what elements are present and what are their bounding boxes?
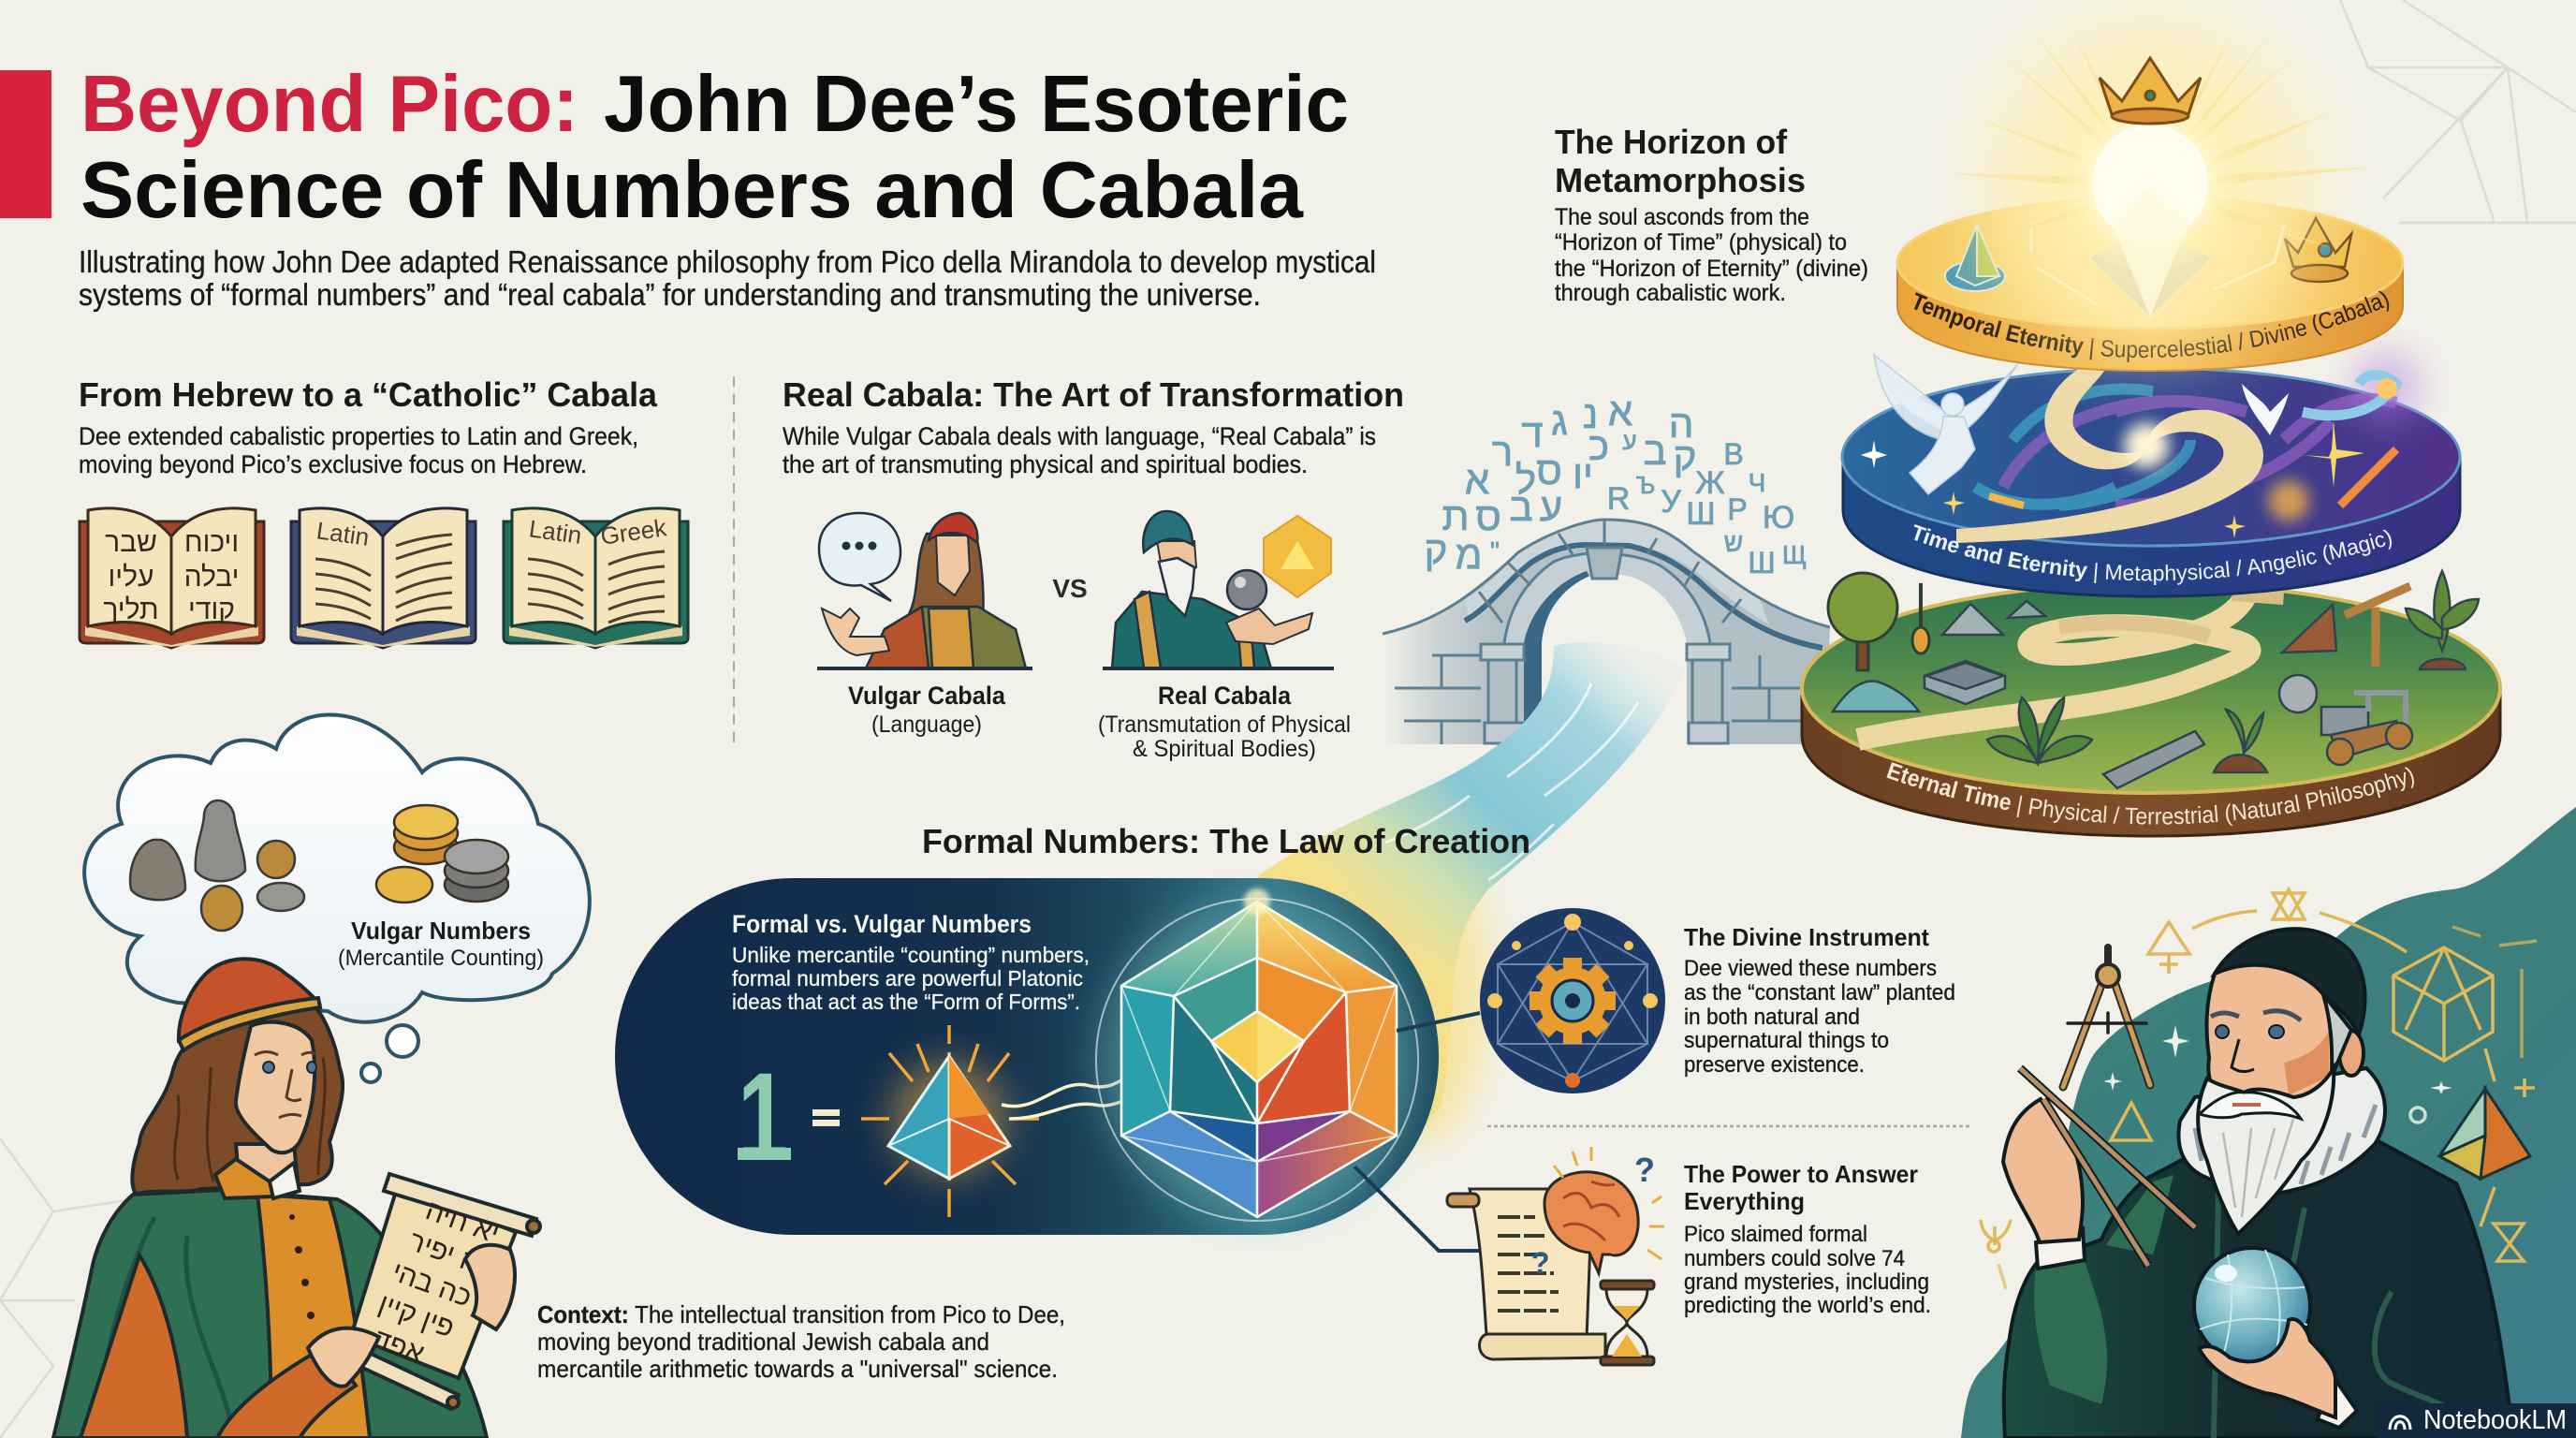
scroll text: אפד: [371, 1324, 428, 1370]
subtitle: Illustrating how John Dee adapted Renaissance philosophy from Pico della Mirandola to develop mystical: [79, 244, 1376, 279]
yellow glow behind pill: [1357, 824, 1488, 1142]
text: context: moving beyond traditional Jewish cabala and: [537, 1328, 989, 1356]
text: the divine instrument: preserve existence.: [1684, 1052, 1865, 1078]
text: the power to answer everything: Pico slaimed formal: [1684, 1222, 1867, 1247]
floating letters: ר: [1492, 430, 1513, 474]
scroll text: יא חיה: [421, 1195, 504, 1250]
upper hand: [2003, 1099, 2083, 1242]
section: from Hebrew to Catholic cabala: moving beyond Pico’s exclusive focus on Hebrew.: [79, 450, 587, 478]
text: the power to answer everything: grand mysteries, including: [1684, 1269, 1929, 1295]
floating letters: У: [1661, 484, 1681, 520]
text: the power to answer everything: [1684, 1160, 1931, 1318]
stream of light: [1236, 642, 1685, 1161]
floating letters: ש: [1724, 528, 1743, 557]
title: Beyond Pico:: [80, 60, 578, 149]
icon: Latin book: [291, 508, 476, 648]
hair: [132, 1003, 343, 1194]
icon: scroll, brain and hourglass: ?: [1634, 1151, 1655, 1189]
floating letters: [1425, 389, 1807, 580]
text: horizon of metamorphosis: [1555, 123, 1868, 306]
tier 2: metaphysical angelic disc: [1842, 353, 2460, 596]
floating letters: כ: [1588, 424, 1609, 468]
text: horizon of metamorphosis: through cabalistic work.: [1555, 280, 1786, 306]
section: real cabala: [783, 375, 1404, 478]
decorative geometric lines top right: [2340, 0, 2576, 223]
panel: formal numbers pill: [615, 878, 1439, 1235]
galaxy arms: [2003, 399, 2396, 506]
floating letters: א: [1608, 389, 1632, 433]
scroll text: יה יפיר: [405, 1225, 490, 1282]
section: from Hebrew to Catholic cabala: From Hebrew to a “Catholic” Cabala: [79, 375, 658, 414]
illustration: real cabala figure: [1112, 511, 1331, 668]
robe: [53, 1190, 487, 1438]
dove: [2242, 384, 2289, 435]
floating letters: Щ: [1782, 540, 1807, 569]
illustration: John Dee: [2003, 929, 2514, 1438]
thought bubbles: [387, 1025, 418, 1057]
icon: scroll, brain and hourglass: [1447, 1147, 1664, 1365]
floating letters: ק: [1425, 528, 1447, 572]
teal background shape: [1961, 807, 2576, 1438]
neck and collar: [236, 1144, 298, 1187]
text: formal vs vulgar: formal numbers are powerful Platonic: [732, 966, 1083, 990]
left prism: [1945, 225, 2005, 291]
section: from Hebrew to Catholic cabala: [79, 375, 658, 478]
label: real cabala: (Transmutation of Physical: [1098, 712, 1351, 738]
text: the divine instrument: in both natural and: [1684, 1005, 1860, 1030]
crystal orb: [2194, 1248, 2310, 1364]
floating letters: B: [1723, 437, 1744, 471]
subtitle: systems of “formal numbers” and “real cabala” for understanding and transmuting the universe.: [79, 277, 1261, 312]
sun with rays: [1945, 19, 2378, 346]
connector to divine instrument: [1397, 1013, 1480, 1031]
text: horizon of metamorphosis: The soul asconds from the: [1555, 204, 1809, 230]
small crown: [2285, 218, 2351, 282]
scroll: [351, 1185, 516, 1378]
text: context: [537, 1300, 1065, 1383]
label: vulgar cabala: (Language): [871, 712, 982, 738]
floating letters: ": [1490, 536, 1500, 565]
text: the power to answer everything: predicting the world’s end.: [1684, 1293, 1931, 1318]
connector to power to answer: [1354, 1167, 1480, 1251]
illustration: Pico della Mirandola: [53, 959, 540, 1438]
text: formal vs vulgar: Formal vs. Vulgar Numbers: [732, 910, 1032, 938]
floating letters: ב: [1643, 429, 1667, 473]
head: [2207, 961, 2333, 1114]
cuff lower: [2318, 1374, 2357, 1428]
icon: Latin and Greek book: Greek: [599, 513, 669, 550]
tier 3 label: Eternal Time | Physical / Terrestrial (Natural Philosophy): [1887, 762, 2414, 826]
floating letters: ד: [1521, 411, 1544, 455]
hat: [2215, 929, 2365, 1034]
machine: [2279, 675, 2317, 712]
symbols around John Dee: [1981, 889, 2537, 1289]
scroll text: כה בהי: [388, 1256, 476, 1313]
icon: Hebrew book: ויכוח: [184, 527, 239, 558]
sapling: [2226, 710, 2263, 753]
text: formal vs vulgar: Unlike mercantile “counting” numbers,: [732, 943, 1090, 967]
icon: Hebrew book: שבר: [105, 527, 157, 558]
rocks and tools: [1833, 571, 2479, 788]
angel: [1874, 355, 2018, 494]
text: the power to answer everything: The Power to Answer: [1684, 1160, 1918, 1188]
winding path: [1858, 594, 2250, 740]
lower arm: [217, 1345, 356, 1438]
title accent bar: [0, 70, 51, 218]
floating letters: Ъ: [1636, 471, 1655, 499]
scroll text: פין קיין: [374, 1288, 459, 1343]
dotted divider: [1487, 1125, 1971, 1127]
dividers: [2020, 1068, 2195, 1266]
floating letters: ע: [1540, 485, 1562, 529]
face: [236, 1022, 315, 1152]
floating letters: R: [1607, 481, 1630, 517]
floating letters: ת: [1442, 494, 1470, 538]
floating letters: Ю: [1763, 500, 1794, 536]
numeral one: 1: [738, 1048, 788, 1187]
subtitle: [79, 244, 1376, 312]
text: the divine instrument: supernatural things to: [1684, 1028, 1889, 1053]
label: vulgar cabala: Vulgar Cabala: [848, 682, 1006, 710]
floating letters: ג: [1551, 399, 1568, 443]
text: the divine instrument: Dee viewed these numbers: [1684, 956, 1937, 981]
floating letters: ס: [1475, 494, 1501, 538]
floating letters: ה: [1669, 402, 1693, 446]
floating letters: ס: [1536, 448, 1562, 492]
text: horizon of metamorphosis: The Horizon of: [1555, 123, 1788, 161]
floating letters: ע: [1622, 427, 1637, 455]
section: real cabala: Real Cabala: The Art of Transformation: [783, 375, 1404, 414]
text: horizon of metamorphosis: Metamorphosis: [1555, 161, 1806, 199]
floating letters: Ш: [1748, 546, 1776, 580]
vulgar baseline: [817, 667, 1032, 670]
text: context: Context: The intellectual transition from Pico to Dee,: [537, 1300, 1065, 1328]
heading: formal numbers: Formal Numbers: The Law of Creation: [922, 822, 1530, 860]
title: Science of Numbers and Cabala: [80, 146, 1304, 235]
section: real cabala: While Vulgar Cabala deals with language, “Real Cabala” is: [783, 422, 1376, 450]
golden path: [2044, 368, 2145, 469]
icon: prism on teal: [2439, 1089, 2530, 1179]
icon: Latin and Greek book: Latin: [527, 514, 583, 550]
thought cloud: [84, 714, 590, 1082]
text: formal vs vulgar: [732, 910, 1090, 1014]
icon: Hebrew book: קודי: [188, 594, 235, 625]
tree: [1828, 573, 1929, 670]
text: the power to answer everything: Everything: [1684, 1187, 1805, 1215]
icon: Latin book: Latin: [315, 516, 371, 551]
icon: compass: [2063, 947, 2150, 1087]
floating letters: Ж: [1695, 465, 1725, 501]
text: the power to answer everything: numbers could solve 74: [1684, 1246, 1905, 1271]
text: formal vs vulgar: ideas that act as the “Form of Forms”.: [732, 990, 1080, 1014]
floating letters: ב: [1509, 485, 1533, 529]
text: horizon of metamorphosis: “Horizon of Time” (physical) to: [1555, 229, 1847, 256]
tier 2 label: Time and Eternity | Metaphysical / Angelic (Magic): [1913, 524, 2392, 585]
decorative geometric lines lower left: [0, 1138, 133, 1438]
icon: Latin and Greek book: [504, 508, 688, 648]
floating letters: נ: [1583, 392, 1598, 436]
vertical divider: [733, 376, 735, 747]
icon: Hebrew book: תליך: [103, 594, 159, 625]
section: from Hebrew to Catholic cabala: Dee extended cabalistic properties to Latin and Greek,: [79, 422, 638, 450]
title: [80, 60, 1349, 235]
cuff upper: [2036, 1228, 2085, 1269]
label: vulgar numbers: (Mercantile Counting): [338, 946, 544, 971]
tier 3: physical terrestrial disc: [1802, 571, 2500, 836]
label: vulgar numbers: Vulgar Numbers: [351, 917, 531, 945]
icon: Hebrew book: עליו: [109, 562, 154, 593]
text: context: mercantile arithmetic towards a "universal" science.: [537, 1355, 1058, 1383]
floating letters: א: [1465, 458, 1489, 502]
label: vulgar numbers: [338, 917, 544, 971]
floating letters: ק: [1674, 434, 1696, 478]
watermark: NotebookLM: [2378, 1403, 2576, 1438]
text: horizon of metamorphosis: the “Horizon of Eternity” (divine): [1555, 256, 1868, 282]
glowing hexagon: [1096, 888, 1418, 1221]
vs label: VS: [1052, 574, 1088, 603]
scroll text: [362, 1191, 504, 1380]
stones: [130, 800, 304, 931]
icon: Hebrew book: יבלה: [184, 562, 239, 593]
label: real cabala: & Spiritual Bodies): [1133, 736, 1316, 762]
real baseline: [1103, 667, 1334, 670]
label: real cabala: [1098, 682, 1351, 762]
floating letters: Ш: [1686, 496, 1716, 532]
floating letters: Ч: [1749, 468, 1765, 497]
equals sign: [812, 1109, 840, 1126]
plant: [1987, 736, 2038, 763]
icon: scroll, brain and hourglass: ?: [1531, 1246, 1550, 1280]
floating letters: P: [1727, 492, 1748, 526]
label: real cabala: Real Cabala: [1158, 682, 1292, 710]
lower hand: [2199, 1319, 2335, 1417]
tool: [2103, 731, 2204, 788]
tier 1 label: Temporal Eternity | Supercelestial / Divine (Cabala): [1913, 290, 2389, 362]
section: real cabala: the art of transmuting physical and spiritual bodies.: [783, 450, 1308, 478]
label: vulgar cabala: [848, 682, 1006, 738]
title: John Dee’s Esoteric: [604, 60, 1349, 149]
eyes: [2216, 1025, 2229, 1038]
floating letters: יו: [1573, 452, 1593, 496]
illustration: bridge: [1383, 520, 1830, 744]
cap: [179, 959, 318, 1040]
icon: divine instrument: [1480, 908, 1665, 1093]
coins: [376, 805, 508, 902]
robe: [2004, 1141, 2514, 1438]
floating letters: מ: [1456, 533, 1482, 577]
beard: [2198, 1068, 2334, 1234]
icon: Hebrew book: [80, 508, 264, 648]
text: the divine instrument: [1684, 923, 1955, 1078]
text: the divine instrument: as the “constant law” planted: [1684, 980, 1955, 1005]
glowing prism: [861, 1025, 1151, 1217]
floating letters: ל: [1515, 458, 1536, 502]
ruff: [2178, 1068, 2385, 1194]
tier 1: temporal eternity disc: [1897, 198, 2403, 371]
decorative stars: [2103, 1025, 2452, 1094]
icon: top crown: [2100, 58, 2201, 124]
hands: [465, 1245, 515, 1329]
illustration: vulgar cabala figure: [819, 513, 1026, 668]
watermark: NotebookLM: NotebookLM: [2423, 1405, 2567, 1435]
text: the divine instrument: The Divine Instrument: [1684, 923, 1929, 951]
